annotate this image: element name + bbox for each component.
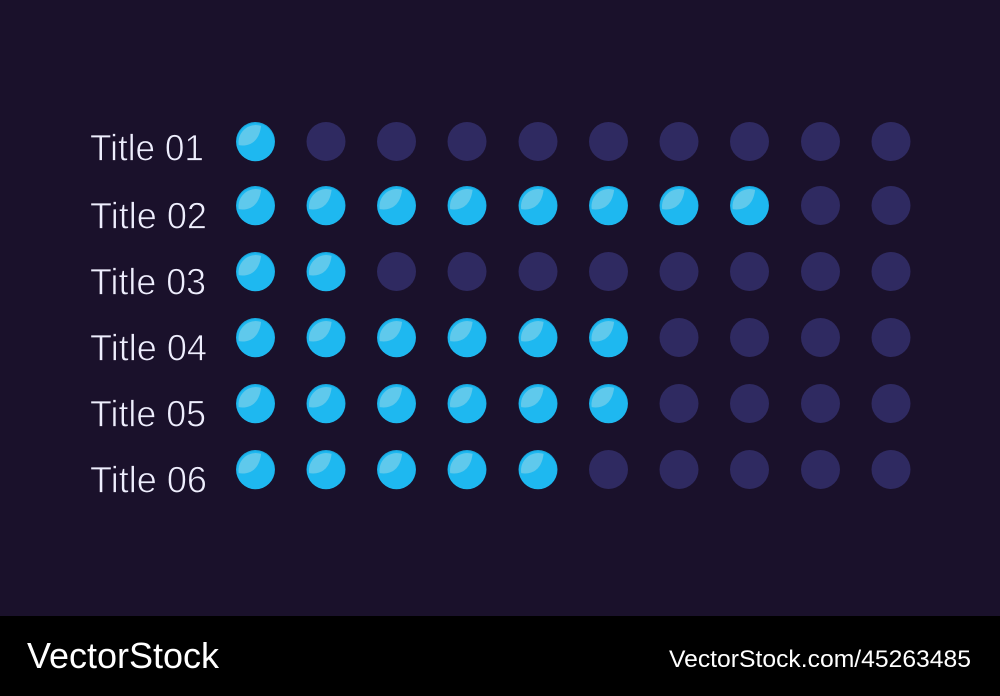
dots: row 6 — [236, 450, 910, 489]
label: Title 04: Title 04 — [90, 327, 207, 369]
row 3: Title 03, 2 of 10 — [90, 252, 910, 303]
row 5: Title 05, 6 of 10 — [90, 384, 910, 435]
dots: row 1 — [236, 122, 910, 161]
row 6: Title 06, 5 of 10 — [90, 450, 910, 501]
row 2: Title 02, 8 of 10 — [90, 186, 910, 237]
dots: row 4 — [236, 318, 910, 357]
dots: row 2 — [236, 186, 910, 225]
footer image id: VectorStock.com/45263485 — [669, 646, 971, 673]
row 1: Title 01, 1 of 10 — [90, 122, 910, 169]
dots: row 3 — [236, 252, 910, 291]
row 4: Title 04, 6 of 10 — [90, 318, 910, 369]
footer logo text: VectorStock — [27, 635, 220, 676]
label: Title 03: Title 03 — [90, 261, 206, 303]
label: Title 06: Title 06 — [90, 459, 207, 501]
label: Title 05: Title 05 — [90, 393, 206, 435]
label: Title 01: Title 01 — [90, 127, 204, 169]
label: Title 02: Title 02 — [90, 195, 207, 237]
dots: row 5 — [236, 384, 910, 423]
footer bar — [0, 616, 1000, 696]
